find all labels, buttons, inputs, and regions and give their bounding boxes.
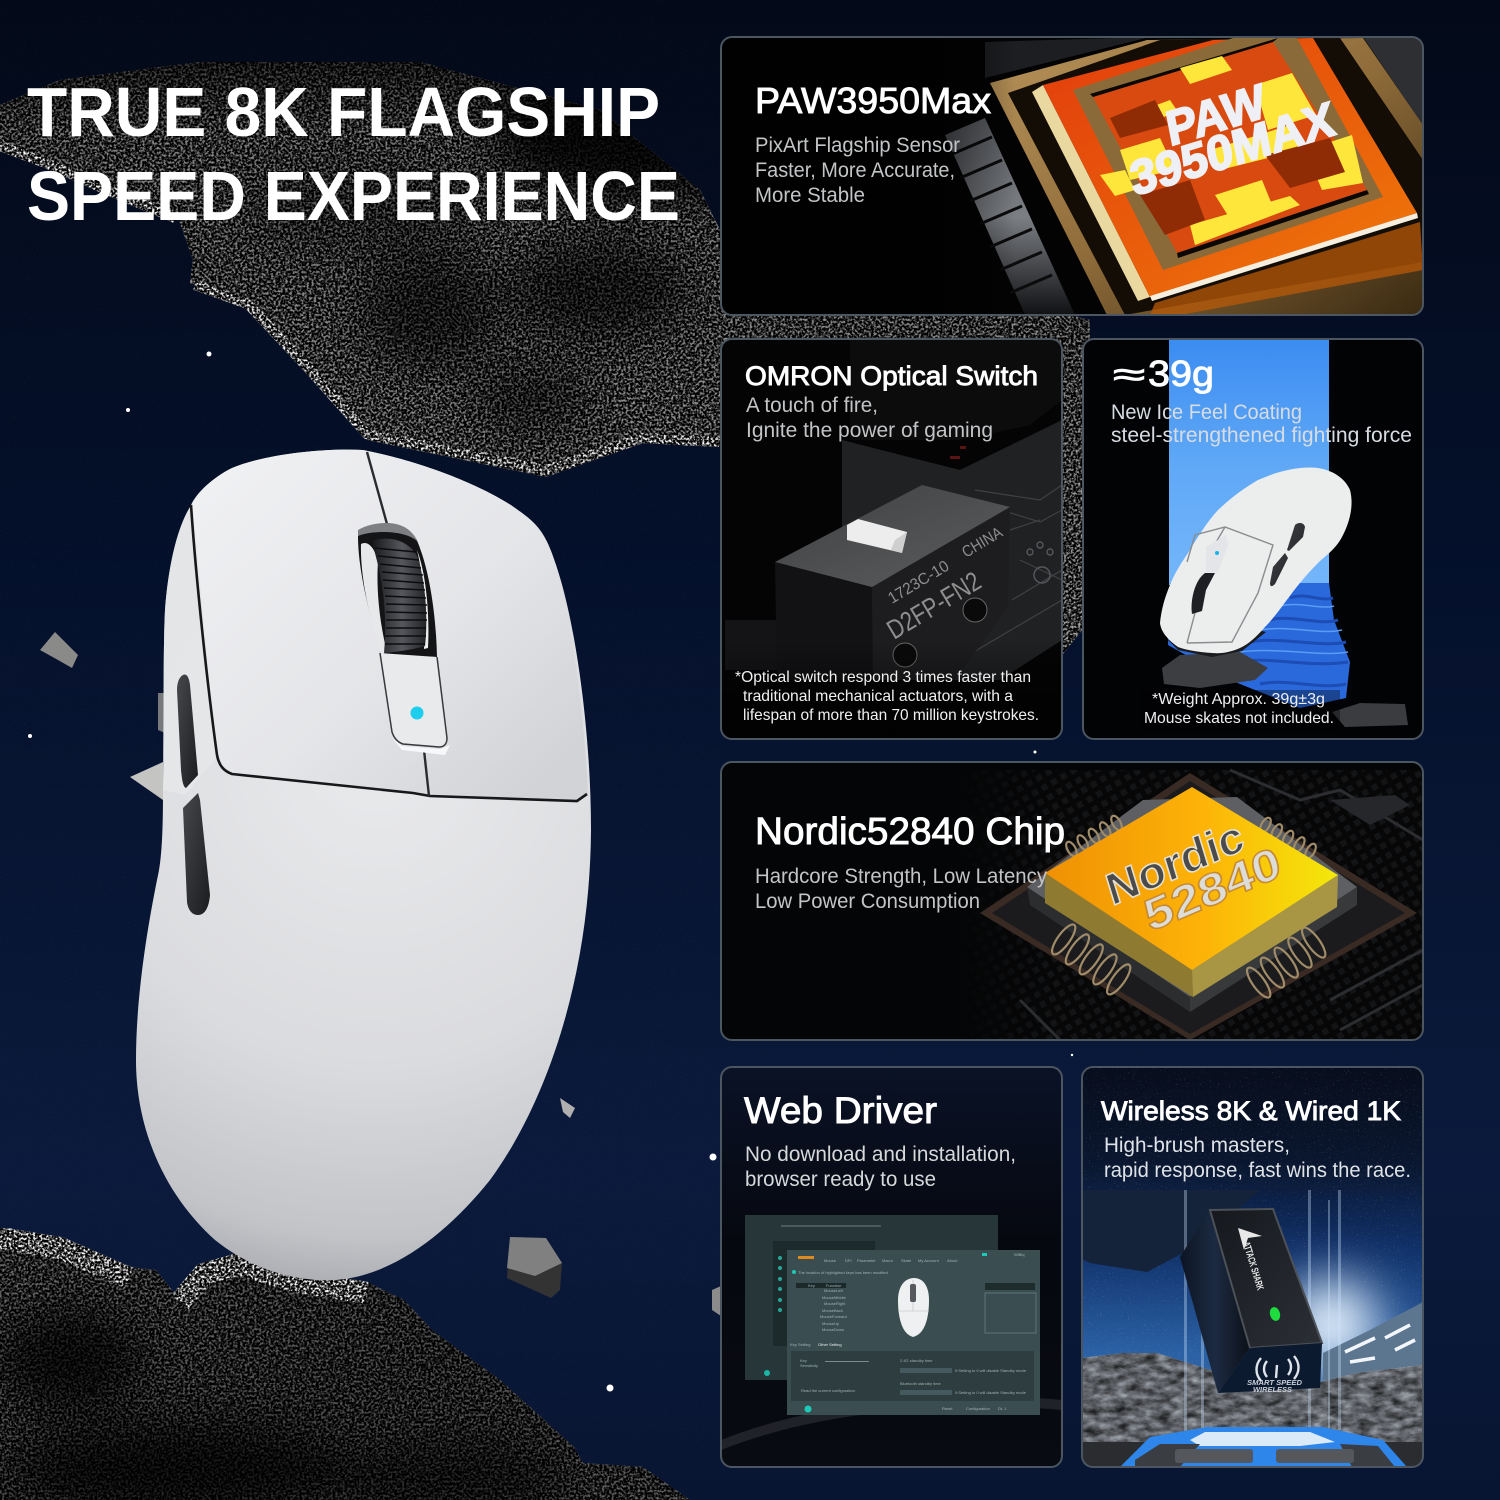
- description: [755, 134, 960, 207]
- wireless receiver: [1180, 1209, 1322, 1394]
- front driver window: MouseDown: [822, 1327, 844, 1332]
- circuit board backdrop: [725, 420, 1061, 680]
- front driver window: MouseLeft: [824, 1288, 844, 1293]
- DPI button: [380, 653, 447, 747]
- title: TRUE 8K FLAGSHIP: [27, 73, 660, 151]
- panel: Web Driver: [721, 1067, 1062, 1467]
- footnote: *Weight Approx. 39g±3g: [1152, 691, 1325, 708]
- front driver window: Macro: [882, 1258, 894, 1263]
- wireless receiver: WIRELESS: [1253, 1385, 1292, 1394]
- front driver window: Reset: [942, 1406, 953, 1411]
- front driver window: Function: [826, 1283, 841, 1288]
- chip label: [1105, 828, 1280, 930]
- front driver window: Read the current configuration: [801, 1388, 855, 1393]
- front driver window: The location of highlighted keys has been modified: [798, 1270, 888, 1275]
- microswitch: [775, 485, 1010, 680]
- heading: Wireless 8K & Wired 1K: [1101, 1096, 1401, 1126]
- planet: [1082, 1190, 1262, 1272]
- heading: PAW3950Max: [755, 80, 991, 121]
- front driver window: Skate: [901, 1258, 912, 1263]
- front driver window: 2.4G standby time: [900, 1358, 933, 1363]
- footnote: lifespan of more than 70 million keystrokes.: [743, 707, 1039, 724]
- small mouse: [1160, 468, 1352, 657]
- stars: [28, 352, 1073, 1392]
- description: Hardcore Strength, Low Latency: [755, 865, 1047, 888]
- heading: Nordic52840 Chip: [755, 811, 1065, 853]
- rock reflection: [1162, 652, 1268, 688]
- wireless receiver: SMART SPEED: [1247, 1378, 1303, 1387]
- driver layer selector: [985, 1283, 1036, 1333]
- panel: PAW3950Max sensor: [721, 37, 1423, 315]
- title: SPEED EXPERIENCE: [27, 157, 680, 235]
- scroll wheel: [358, 523, 450, 755]
- front driver window: MouseUp: [822, 1321, 840, 1326]
- description: [746, 394, 993, 442]
- rock fragments: [40, 632, 721, 1316]
- front driver window: MouseMiddle: [822, 1295, 847, 1300]
- chip label: PAW: [1162, 74, 1270, 157]
- front driver window: 0:Setting to 0 will disable Standby mode: [955, 1390, 1027, 1395]
- description: PixArt Flagship Sensor: [755, 134, 960, 157]
- mountains: [1083, 1302, 1422, 1442]
- side buttons: [177, 675, 210, 915]
- description: High-brush masters,: [1104, 1134, 1290, 1157]
- description: More Stable: [755, 184, 865, 207]
- footnote: [1144, 691, 1334, 727]
- description: [1111, 401, 1412, 447]
- heading: 39g: [1148, 353, 1214, 394]
- coils: [1048, 814, 1329, 1001]
- front driver window: About: [947, 1258, 958, 1263]
- heading: Web Driver: [744, 1090, 937, 1131]
- microswitch: 1723C-10: [885, 558, 952, 607]
- back driver window: [745, 1215, 998, 1380]
- description: browser ready to use: [745, 1168, 936, 1191]
- blue light column and water: [1168, 339, 1350, 708]
- mouse skates: [1332, 703, 1408, 727]
- front driver window: WiBlq: [1014, 1252, 1024, 1257]
- description: Low Power Consumption: [755, 890, 980, 913]
- front driver window: Key Setting: [790, 1342, 810, 1347]
- chip: [1027, 787, 1357, 1012]
- sun glow: [1287, 1280, 1377, 1370]
- description: Faster, More Accurate,: [755, 159, 955, 182]
- panel: 39g weight: [1083, 339, 1423, 739]
- wireless receiver: ATTACK SHARK: [1240, 1241, 1265, 1292]
- chip label: 3950MAX: [1126, 92, 1339, 207]
- front driver window: DPI: [845, 1258, 852, 1263]
- chip label: 52840: [1139, 838, 1286, 942]
- footnote: *Optical switch respond 3 times faster than: [735, 669, 1031, 686]
- description: New Ice Feel Coating: [1111, 401, 1302, 424]
- front driver window: MouseRight: [824, 1301, 846, 1306]
- sensor chip artwork: [945, 37, 1423, 315]
- description: steel-strengthened fighting force: [1111, 424, 1412, 447]
- heading: [1113, 353, 1214, 394]
- rock: upper asteroid: [0, 60, 1090, 670]
- description: [745, 1143, 1016, 1191]
- description: No download and installation,: [745, 1143, 1016, 1166]
- footnote: [735, 669, 1039, 724]
- microswitch: D2FP-FN2: [882, 566, 986, 645]
- footnote: Mouse skates not included.: [1144, 710, 1334, 727]
- chip label: Nordic: [1101, 812, 1249, 916]
- rock: lower asteroid: [0, 1228, 690, 1500]
- description: [1104, 1134, 1411, 1182]
- front driver window: Key: [800, 1358, 807, 1363]
- motherboard backdrop: [960, 762, 1423, 1040]
- description: [755, 865, 1047, 913]
- description: rapid response, fast wins the race.: [1104, 1159, 1411, 1182]
- title: [27, 73, 680, 235]
- light beams: [1184, 1190, 1341, 1440]
- driver mouse image: [898, 1278, 929, 1337]
- heading: OMRON Optical Switch: [745, 361, 1038, 391]
- heading: ≈: [1113, 356, 1145, 394]
- top shell buttons: [192, 450, 588, 800]
- panel: OMRON optical switch: [721, 339, 1062, 739]
- product: white gaming mouse: [136, 450, 591, 1280]
- description: Ignite the power of gaming: [746, 419, 993, 442]
- front driver window: [787, 1250, 1040, 1415]
- microswitch: CHINA: [959, 524, 1006, 561]
- front driver window: Other Setting: [818, 1342, 842, 1347]
- front driver window: Bluetooth standby time: [900, 1381, 941, 1386]
- front driver window: Configuration: [966, 1406, 990, 1411]
- front driver window: Key: [808, 1283, 815, 1288]
- front driver window: 0:Setting to 0 will disable Standby mode: [955, 1368, 1027, 1373]
- front driver window: Parameter: [857, 1258, 876, 1263]
- panel: Nordic52840 chip: [721, 762, 1423, 1040]
- panel: wireless 8K and wired 1K: [1082, 1067, 1423, 1467]
- front driver window: MouseBack: [822, 1308, 843, 1313]
- front driver window: DL 1: [998, 1406, 1007, 1411]
- footnote: traditional mechanical actuators, with a: [743, 688, 1013, 705]
- front driver window: Sensitivity: [800, 1363, 818, 1368]
- front driver window: MouseForward: [820, 1314, 847, 1319]
- charging dock: [1082, 1427, 1423, 1467]
- description: A touch of fire,: [746, 394, 878, 417]
- front driver window: Mouse: [824, 1258, 837, 1263]
- front driver window: My Account: [918, 1258, 940, 1263]
